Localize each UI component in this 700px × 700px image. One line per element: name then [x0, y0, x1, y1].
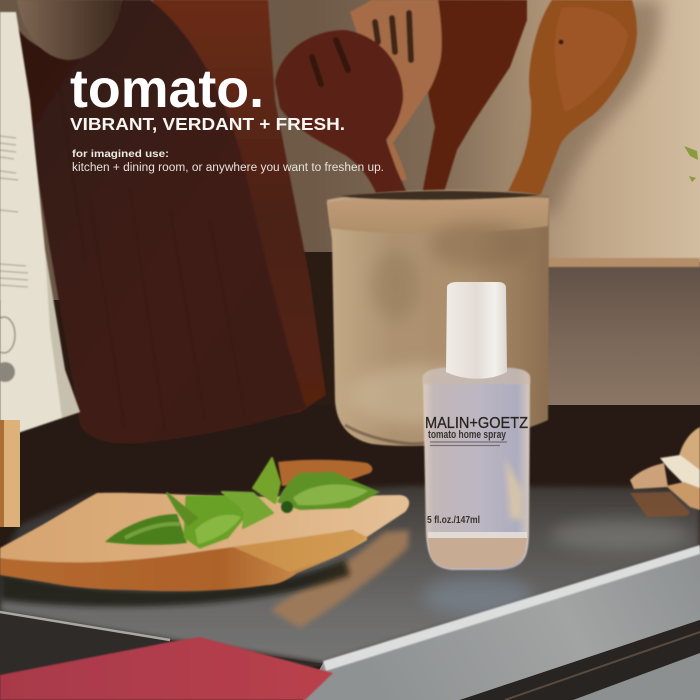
counter surface [0, 405, 700, 700]
slotted spatula, back [350, 0, 442, 180]
wooden block at left [0, 420, 20, 527]
bright edge highlight [323, 545, 700, 671]
stoneware crock [327, 190, 549, 446]
fine print [430, 442, 507, 446]
spoon resting behind cutting board [278, 460, 372, 486]
brand label: MALIN+GOETZ [425, 415, 528, 432]
reddish back board [153, 0, 326, 430]
bottle reflection [423, 576, 533, 616]
red towel [0, 637, 333, 700]
volume: 5 fl.oz./147ml [427, 515, 480, 526]
liquid bottom [428, 538, 527, 568]
steel counter front edge [303, 548, 700, 700]
garlic papers [630, 427, 700, 517]
right spoon [503, 0, 637, 203]
brushed steel surface [0, 486, 700, 663]
tall back spoon [420, 0, 527, 205]
product name: tomato home spray [428, 429, 507, 441]
usage label: for imagined use: [72, 148, 169, 160]
board reflection on steel [270, 530, 409, 628]
background wall [0, 0, 700, 300]
steel glare [550, 519, 690, 551]
glass body [423, 368, 530, 570]
lower steel panel [573, 653, 700, 700]
light wooden cutting board [0, 493, 409, 591]
board handle hole [17, 0, 122, 60]
dim steel left of board [0, 490, 100, 560]
white cap [446, 282, 507, 379]
subtitle: VIBRANT, VERDANT + FRESH. [70, 114, 345, 134]
cutting board shadow [0, 560, 350, 607]
slotted front spoon [275, 30, 412, 205]
product bottle [423, 282, 530, 570]
title: tomato. [70, 60, 264, 119]
sink opening [0, 612, 330, 700]
spoon shadow on wall [520, 0, 661, 215]
dark area left of crock [290, 252, 340, 412]
board wood grain [60, 90, 245, 430]
lower dark gap [460, 620, 700, 700]
steel backsplash [540, 258, 700, 424]
refraction [505, 458, 522, 520]
usage text: kitchen + dining room, or anywhere you want to freshen up. [72, 162, 384, 174]
basil leaves [105, 458, 380, 547]
open book [0, 12, 80, 437]
shoulder [423, 368, 530, 384]
plant sprig at right edge [684, 146, 698, 182]
dark cutting board [17, 0, 306, 443]
wooden spoons [275, 0, 637, 205]
